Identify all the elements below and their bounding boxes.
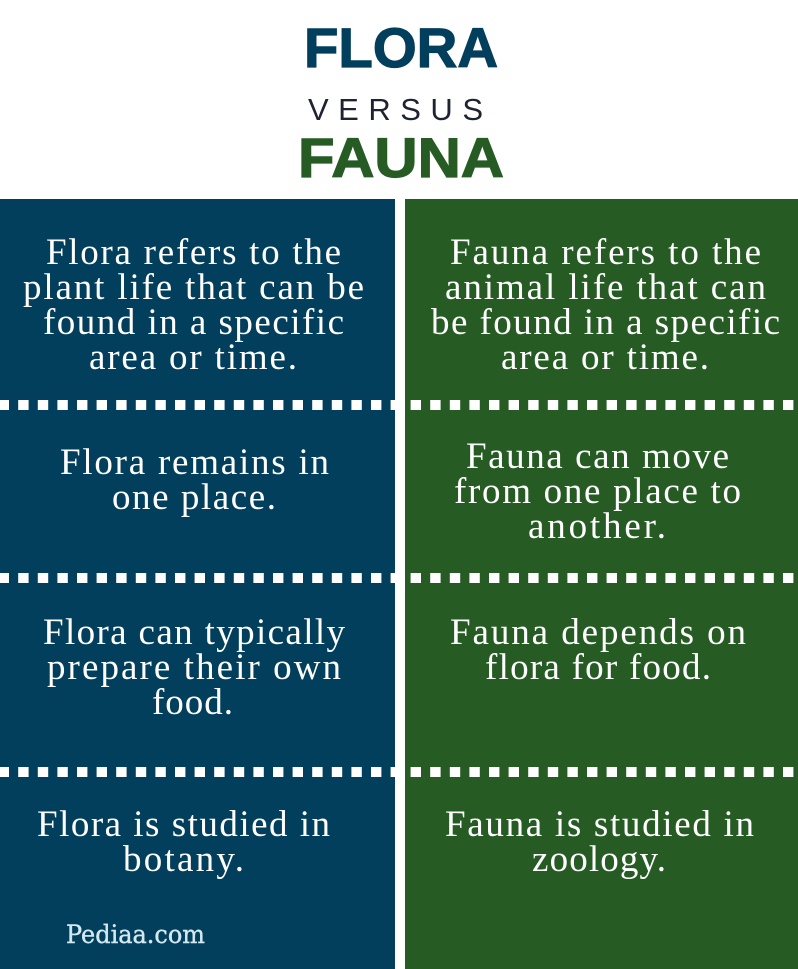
flora food xyxy=(43,612,346,723)
fauna definition: be found in a specific xyxy=(431,302,780,343)
flora movement: Flora remains in xyxy=(60,442,329,483)
flora definition: area or time. xyxy=(89,337,297,378)
flora study: botany. xyxy=(123,839,244,880)
fauna background xyxy=(405,199,798,969)
flora movement xyxy=(60,442,329,518)
fauna definition: Fauna refers to the xyxy=(450,232,761,273)
subtitle: versus: VERSUS xyxy=(308,92,483,127)
flora definition: Flora refers to the xyxy=(46,232,341,273)
flora definition xyxy=(23,232,364,378)
flora study xyxy=(37,804,330,880)
flora food: prepare their own xyxy=(47,647,341,688)
title: Fauna: FAUNA xyxy=(298,126,504,189)
fauna study: Fauna is studied in xyxy=(445,804,754,845)
panel: fauna xyxy=(405,199,798,969)
fauna definition: animal life that can xyxy=(445,267,766,308)
flora food: Flora can typically xyxy=(43,612,346,653)
flora background xyxy=(0,199,395,969)
fauna study xyxy=(445,804,754,880)
fauna food xyxy=(450,612,746,688)
title: Flora: FLORA xyxy=(304,16,498,79)
flora study: Flora is studied in xyxy=(37,804,330,845)
fauna food: flora for food. xyxy=(485,647,711,688)
flora definition: found in a specific xyxy=(43,302,344,343)
fauna study: zoology. xyxy=(532,839,666,880)
fauna movement: Fauna can move xyxy=(466,436,729,477)
flora definition: plant life that can be xyxy=(23,267,364,308)
brand: Pediaa.com: Pediaa.com xyxy=(66,920,205,949)
fauna movement: another. xyxy=(528,506,666,547)
fauna movement: from one place to xyxy=(454,471,741,512)
fauna definition xyxy=(431,232,780,378)
fauna movement xyxy=(454,436,741,547)
fauna food: Fauna depends on xyxy=(450,612,746,653)
flora movement: one place. xyxy=(112,477,276,518)
flora food: food. xyxy=(152,682,233,723)
panel: flora xyxy=(0,199,395,969)
fauna definition: area or time. xyxy=(501,337,709,378)
